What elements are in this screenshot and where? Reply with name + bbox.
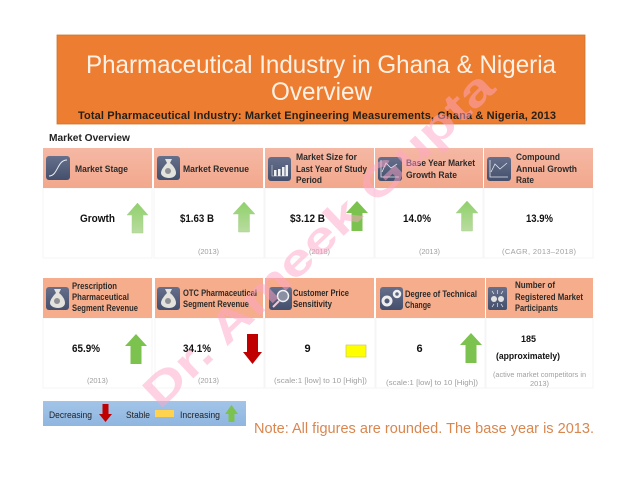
header labels: Rate bbox=[516, 175, 534, 185]
period notes: (2013) bbox=[419, 247, 440, 256]
icon: s-curve bbox=[46, 156, 70, 180]
arrow: base year growth up bbox=[456, 201, 478, 231]
scale and period notes: (scale:1 [low] to 10 [High]) bbox=[274, 376, 368, 385]
header labels: Customer Price bbox=[293, 288, 349, 298]
arrow: growth up bbox=[127, 203, 148, 233]
header labels: Segment Revenue bbox=[183, 299, 249, 309]
legend bbox=[43, 401, 246, 426]
arrow: OTC down bbox=[243, 334, 262, 364]
arrow: prescription up bbox=[125, 334, 147, 364]
scale and period notes: 2013) bbox=[530, 379, 550, 388]
note: Note: All figures are rounded. The base year is 2013. bbox=[254, 421, 594, 437]
header labels: Market Stage bbox=[75, 164, 128, 174]
header labels: Prescription bbox=[72, 281, 117, 291]
scale and period notes: (2013) bbox=[87, 376, 108, 385]
values: 9 bbox=[304, 343, 311, 355]
icon: growth line chart bbox=[487, 157, 511, 181]
values bbox=[72, 334, 560, 361]
arrow: market size up bbox=[346, 201, 368, 231]
icon: OTC money bag bbox=[157, 287, 180, 310]
subtitle: Total Pharmaceutical Industry: Market Engineering Measurements, Ghana & Nigeria, 2013 bbox=[78, 110, 556, 122]
icon: line chart bbox=[378, 157, 402, 181]
title second line: Overview bbox=[271, 78, 373, 106]
values: Growth bbox=[80, 213, 115, 225]
header labels: Base Year Market bbox=[406, 158, 475, 168]
header strip bbox=[43, 278, 593, 318]
icon: magnifier bbox=[269, 287, 292, 310]
header labels bbox=[75, 152, 577, 185]
header labels: Change bbox=[405, 300, 431, 310]
header labels: Pharmaceutical bbox=[72, 292, 129, 302]
header labels: OTC Pharmaceutical bbox=[183, 288, 257, 298]
header labels: Market Size for bbox=[296, 152, 357, 162]
title: Pharmaceutical Industry in Ghana & Nigeria bbox=[86, 51, 556, 79]
watermark: Dr. Ameek Gupta bbox=[133, 61, 505, 417]
values: 13.9% bbox=[526, 213, 553, 225]
icon: gears bbox=[380, 287, 403, 310]
values: 185 bbox=[521, 334, 536, 344]
values: 34.1% bbox=[183, 343, 211, 355]
panel: row 2 metrics bbox=[43, 278, 593, 388]
header labels: Annual Growth bbox=[516, 164, 577, 174]
arrow: increasing bbox=[225, 405, 238, 422]
period notes: (2018) bbox=[309, 247, 330, 256]
arrow: decreasing bbox=[99, 404, 112, 422]
period notes bbox=[198, 247, 576, 256]
header labels: Number of bbox=[515, 280, 556, 290]
scale and period notes bbox=[87, 370, 586, 388]
header labels: Period bbox=[296, 175, 322, 185]
arrow: technical change up bbox=[460, 333, 482, 363]
legend: Increasing bbox=[180, 410, 220, 420]
icon: prescription money bag bbox=[46, 287, 69, 310]
header strip bbox=[43, 148, 593, 188]
header labels: Last Year of Study bbox=[296, 164, 367, 174]
scale and period notes: (active market competitors in bbox=[493, 370, 586, 379]
header labels: Registered Market bbox=[515, 292, 583, 302]
values: 65.9% bbox=[72, 343, 100, 355]
title banner bbox=[57, 35, 585, 124]
period notes: (2013) bbox=[198, 247, 220, 256]
values: 14.0% bbox=[403, 213, 431, 225]
header labels bbox=[72, 280, 583, 313]
header labels: Growth Rate bbox=[406, 170, 457, 180]
values: (approximately) bbox=[496, 351, 560, 361]
header labels: Segment Revenue bbox=[72, 303, 138, 313]
header labels: Compound bbox=[516, 152, 560, 162]
arrow: revenue up bbox=[233, 202, 255, 232]
marker: price stable bbox=[346, 345, 366, 357]
icon: money bag bbox=[157, 156, 180, 180]
header labels: Sensitivity bbox=[293, 299, 332, 309]
values: $1.63 B bbox=[180, 213, 214, 225]
section heading: market overview: Market Overview bbox=[49, 133, 130, 144]
panel: row 1 metrics bbox=[43, 148, 593, 258]
header labels: Market Revenue bbox=[183, 164, 249, 174]
header labels: Degree of Technical bbox=[405, 289, 477, 299]
values: 6 bbox=[416, 343, 423, 355]
card backgrounds bbox=[43, 188, 593, 258]
scale and period notes: (scale:1 [low] to 10 [High]) bbox=[386, 378, 479, 387]
marker: stable bbox=[155, 410, 174, 417]
legend: Stable bbox=[126, 410, 150, 420]
icon: participants bbox=[488, 287, 507, 310]
period notes: (CAGR, 2013–2018) bbox=[502, 247, 576, 256]
legend: Decreasing bbox=[49, 410, 92, 420]
values bbox=[80, 213, 553, 225]
card backgrounds bbox=[43, 318, 593, 388]
scale and period notes: (2013) bbox=[198, 376, 220, 385]
icon: bar chart bbox=[268, 157, 291, 181]
values: $3.12 B bbox=[290, 213, 325, 225]
header labels: Participants bbox=[515, 303, 558, 313]
